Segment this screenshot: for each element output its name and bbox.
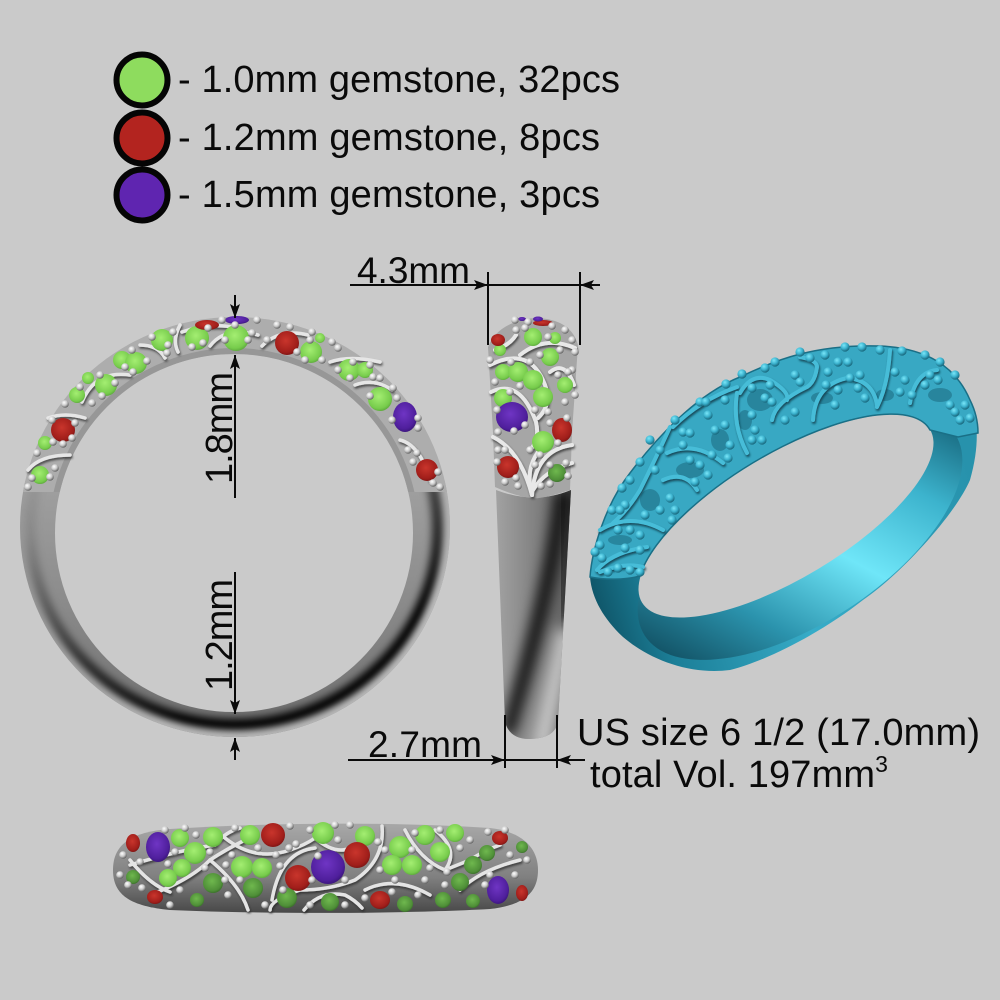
dimension: 2.7mm width [348, 715, 585, 768]
purple gemstones [225, 316, 417, 432]
label: 4.3mm: 4.3mm [357, 250, 470, 291]
blue filigree arcs [597, 350, 937, 572]
blue inner surface [597, 360, 1000, 710]
side darker green gemstone [548, 464, 566, 482]
red gemstones [51, 320, 438, 481]
blue shadow recesses [608, 388, 952, 545]
panel: top view of ring [113, 821, 538, 913]
side purple gemstones [496, 316, 543, 432]
top view green gemstones [159, 822, 464, 887]
side shank [496, 490, 571, 739]
label: ring size: US size 6 1/2 (17.0mm) [577, 712, 980, 754]
panel: front view of ring [15, 316, 455, 742]
dimension: 1.8mm band height [230, 295, 240, 498]
label: total volume: total Vol. 197mm [590, 754, 875, 796]
panel: perspective render of ring (blue) [590, 342, 1000, 710]
bead accents [24, 316, 444, 491]
dimension: 4.3mm width [350, 272, 600, 345]
blue outer rim [590, 346, 977, 671]
blue pave band [590, 346, 978, 579]
filigree arcs [28, 325, 430, 480]
ring shank [20, 480, 450, 737]
top view purple gemstones [146, 832, 509, 904]
dimension: 1.2mm shank height [230, 572, 240, 760]
legend item: red 1.2mm gemstone: - 1.2mm gemstone, 8pcs [178, 117, 600, 159]
label: 1.8mm: 1.8mm [199, 372, 241, 484]
top view shaded green gemstones [126, 841, 528, 912]
green gemstones [31, 325, 392, 484]
top view bead accents [116, 821, 531, 909]
ring opening [610, 376, 962, 656]
pave band [24, 317, 444, 492]
blue bead accents [590, 342, 975, 577]
side filigree arcs [490, 335, 575, 495]
side green gemstones [494, 328, 573, 453]
panel: side view of ring [486, 316, 579, 750]
top view red gemstones [126, 823, 528, 909]
label: 2.7mm: 2.7mm [368, 724, 482, 765]
legend item: green 1.0mm gemstone: - 1.0mm gemstone, 32pcs [178, 59, 620, 101]
legend item: purple 1.5mm gemstone: - 1.5mm gemstone, 3pcs [178, 174, 600, 216]
legend [116, 54, 620, 220]
side pave band [488, 318, 578, 498]
side bead accents [486, 316, 579, 490]
label: total volume: 3 [875, 751, 888, 777]
label: 1.2mm: 1.2mm [199, 579, 241, 691]
side red gemstones [491, 320, 572, 478]
top band body [113, 824, 538, 913]
top view filigree arcs [130, 826, 520, 910]
